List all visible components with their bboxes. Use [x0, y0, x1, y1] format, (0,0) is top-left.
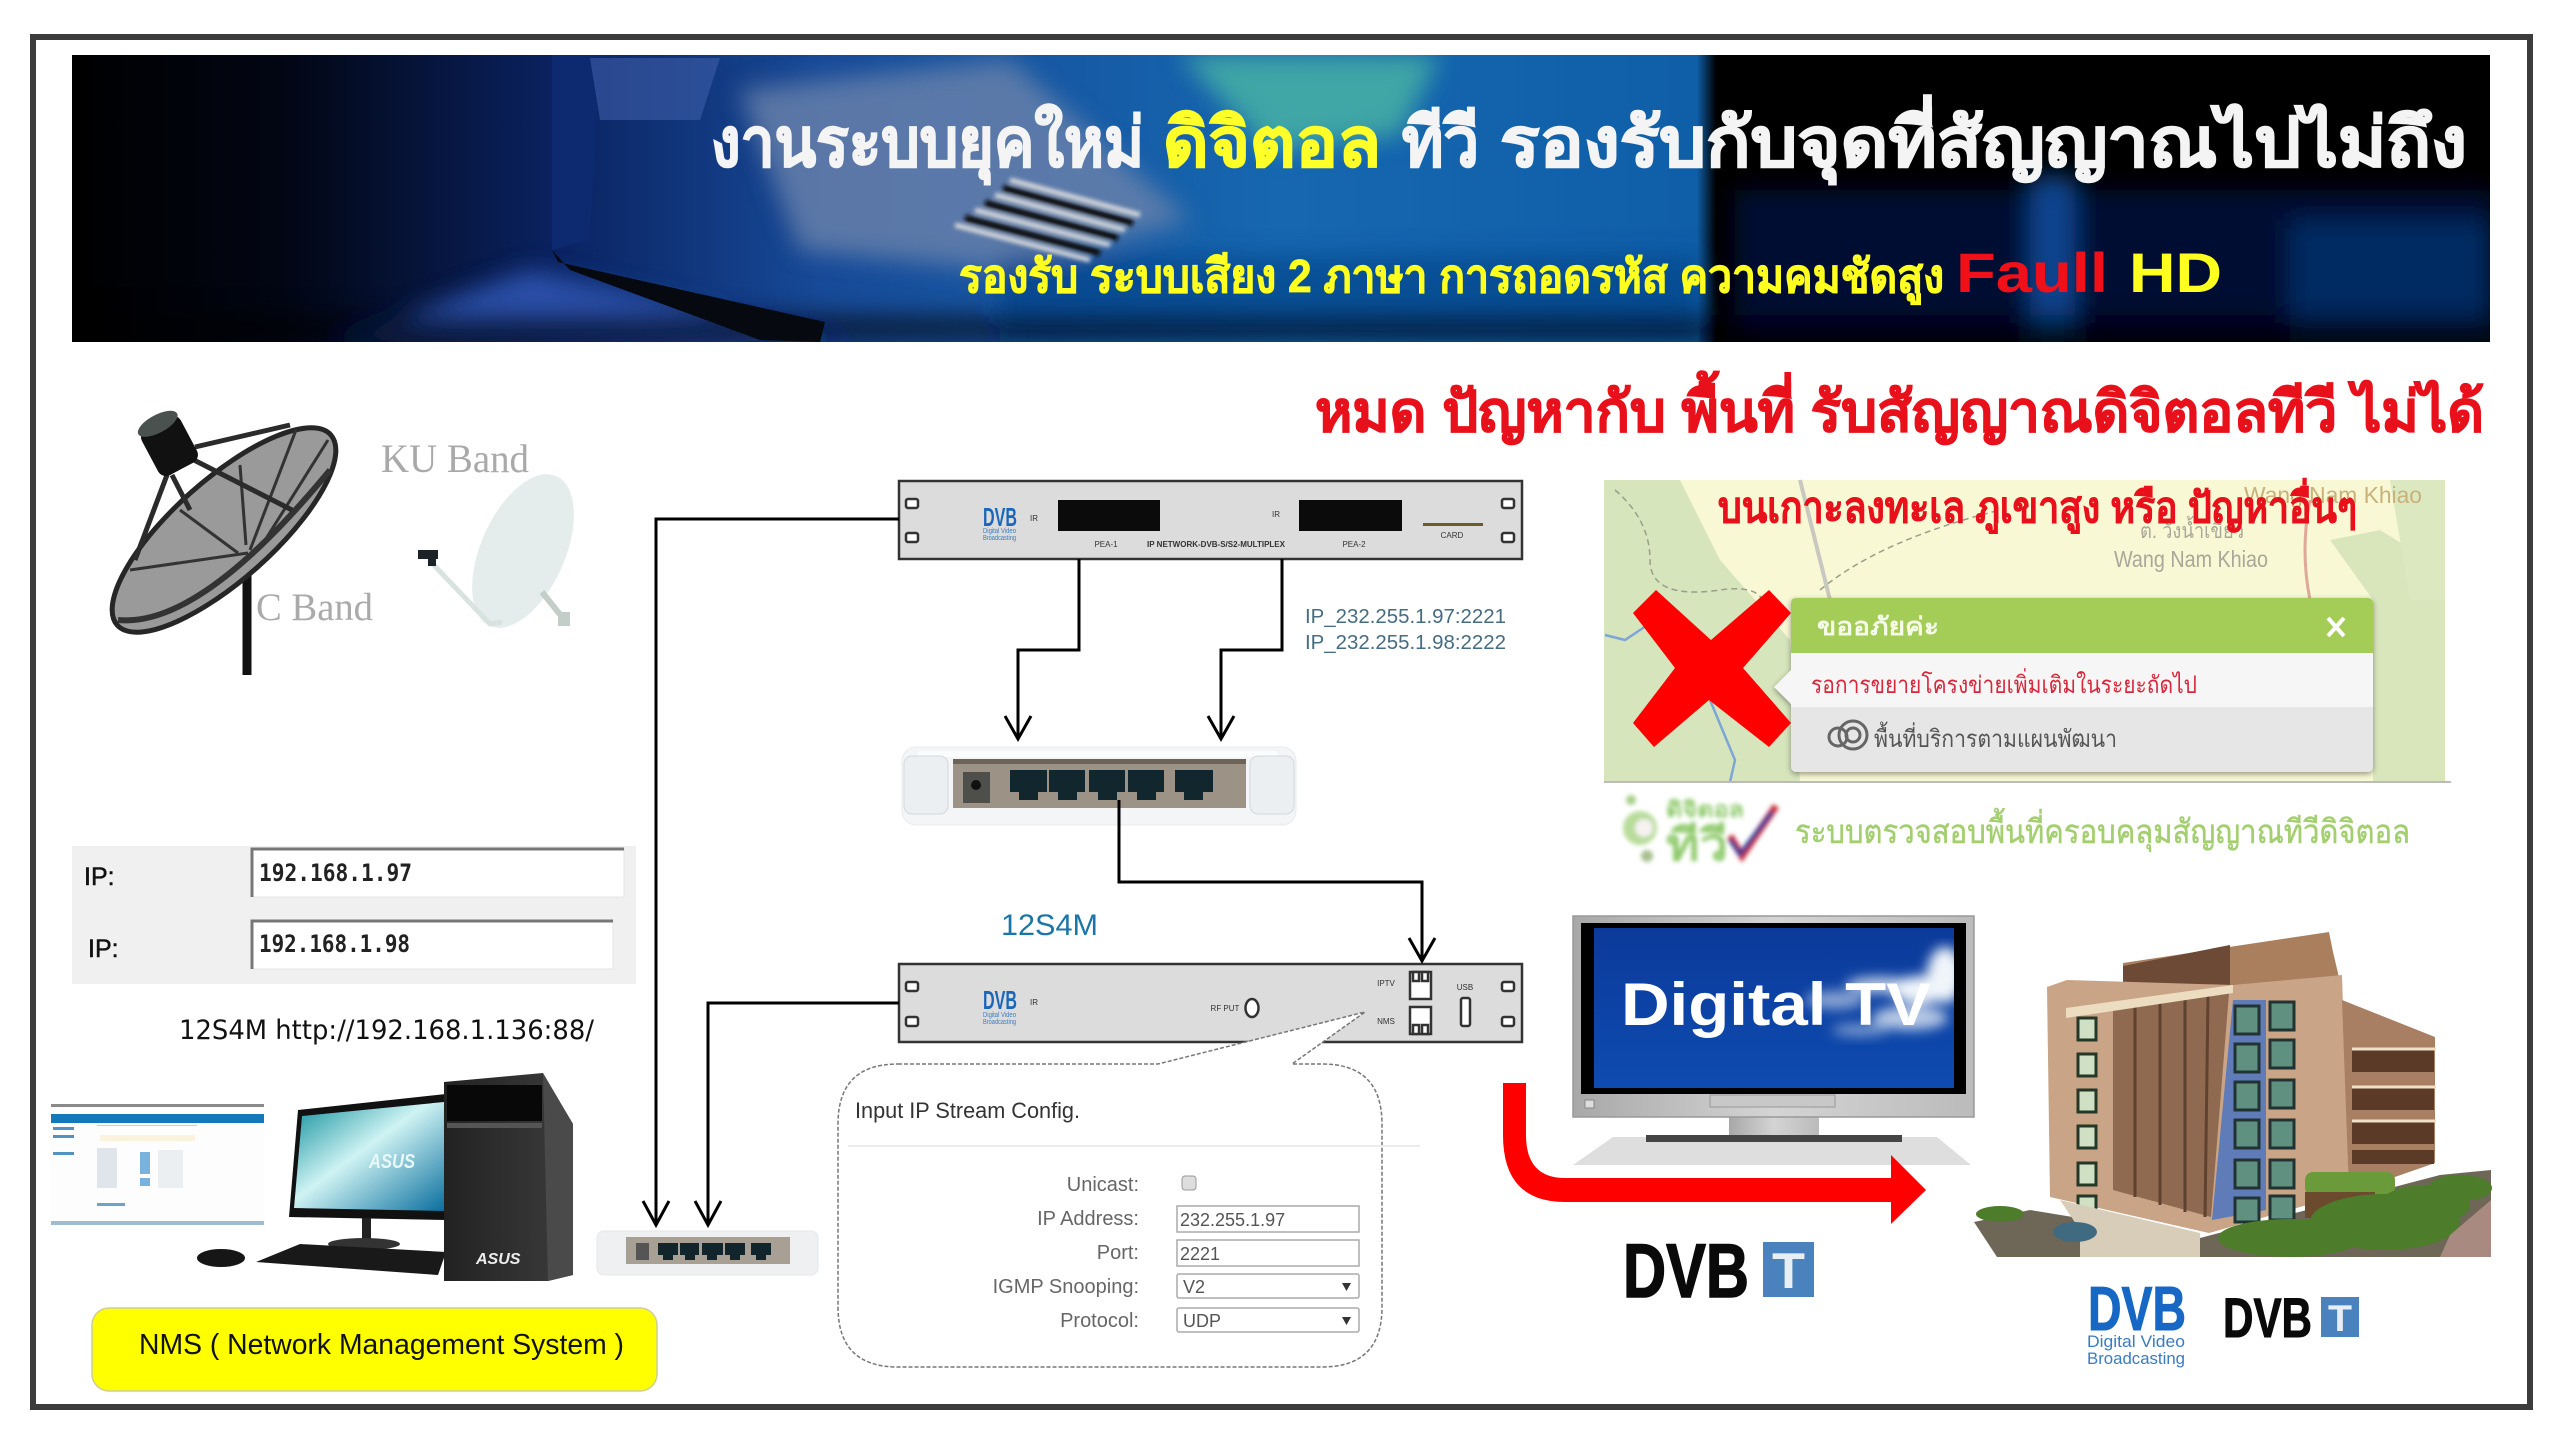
banner title: ทีวี — [1402, 105, 1479, 181]
banner title: ดิจิตอล — [1163, 105, 1381, 181]
arrow: 12S4M to NMS switch — [695, 1003, 899, 1225]
arrow: PEA-1 to switch — [1005, 559, 1079, 739]
logo: DVB-T small: T — [2328, 1298, 2352, 1339]
callout: input IP stream config: Input IP Stream Config. — [855, 1098, 1080, 1123]
banner subtitle: รองรับ ระบบเสียง 2 ภาษา การถอดรหัส ความคมชัดสูง — [959, 250, 1944, 305]
logo: DVB: Digital Video — [983, 528, 1016, 535]
popup: no service: ขออภัยค่ะ — [1817, 613, 1939, 641]
banner subtitle: Faull — [1956, 241, 2108, 304]
red problem heading: หมด ปัญหากับ พื้นที่ รับสัญญาณดิจิตอลทีวี ไม่ได้ — [1315, 371, 2484, 445]
logo: digital TV check: ดิจิตอล — [1666, 797, 1744, 822]
form values: V2 — [1183, 1277, 1205, 1297]
panel: NMS label: NMS ( Network Management System ) — [139, 1329, 624, 1361]
panel labels: PEA-1 — [1094, 540, 1118, 549]
device: DVB-S/S2 multiplex rack — [899, 481, 1522, 559]
multicast IP labels: IP_232.255.1.97:2221 — [1305, 606, 1506, 628]
logo: DVB blue: Broadcasting — [2087, 1349, 2185, 1368]
building windows — [2078, 1018, 2096, 1216]
building gardens — [1976, 1172, 2492, 1257]
form fields — [1177, 1206, 1359, 1332]
logo: DVB: Broadcasting — [983, 535, 1016, 542]
ip labels: IP: — [84, 863, 115, 891]
banner subtitle — [959, 241, 2222, 305]
tower — [444, 1073, 573, 1281]
panel labels: IP NETWORK-DVB-S/S2-MULTIPLEX — [1147, 540, 1286, 549]
form labels — [993, 1174, 1139, 1332]
building ground — [1974, 1170, 2491, 1257]
logo: DVB blue: DVB — [2088, 1275, 2186, 1344]
device: 12S4M rack: NMS — [1377, 1017, 1395, 1026]
form values: 2221 — [1180, 1244, 1220, 1264]
monitor — [289, 1094, 446, 1250]
connection arrows — [643, 519, 1435, 1225]
icon: KU band dish — [418, 459, 595, 643]
screenshot: NMS web page — [51, 1104, 264, 1225]
label: 12S4M: 12S4M — [1001, 909, 1098, 942]
panel: coverage map — [1604, 478, 2451, 782]
banner — [72, 55, 2495, 342]
logo: digital TV check: ทีวี — [1666, 821, 1728, 870]
arrow: PEA-2 to switch — [1208, 559, 1282, 739]
logo: DVB: Digital Video — [983, 1012, 1016, 1019]
banner title — [711, 94, 2467, 185]
dropdown markers — [1342, 1283, 1351, 1325]
form labels: Protocol: — [1060, 1310, 1139, 1332]
multicast IP labels — [1305, 606, 1506, 654]
popup: no service: รอการขยายโครงข่ายเพิ่มเติมในระยะถัดไป — [1811, 668, 2197, 699]
logo: DVB: DVB — [983, 985, 1017, 1015]
icon: apartment building — [1974, 932, 2492, 1257]
label: C Band: C Band — [256, 586, 373, 629]
banner title: รองรับกับจุดที่สัญญาณไปไม่ถึง — [1500, 94, 2467, 185]
device: 12S4M rack: USB — [1457, 983, 1473, 992]
popup: no service: พื้นที่บริการตามแผนพัฒนา — [1874, 721, 2117, 753]
form labels: IGMP Snooping: — [993, 1276, 1139, 1298]
ip input 1 — [252, 849, 624, 897]
multicast IP labels: IP_232.255.1.98:2222 — [1305, 632, 1506, 654]
panel labels: IR — [1272, 510, 1280, 519]
form labels: Port: — [1097, 1242, 1139, 1264]
switch: main — [902, 747, 1296, 825]
banner title: งานระบบยุคใหม่ — [711, 103, 1144, 185]
ip input 1: 192.168.1.97 — [259, 859, 412, 887]
ip input 2: 192.168.1.98 — [259, 930, 410, 958]
ip labels: IP: — [88, 935, 119, 963]
arrow: red broadcast — [1503, 1083, 1926, 1224]
banner subtitle: HD — [2129, 241, 2222, 304]
panel: IP settings — [72, 846, 636, 984]
logo: DVB — [983, 502, 1017, 542]
ip input 2 — [252, 921, 613, 969]
arrow: multiplex to NMS switch — [643, 519, 899, 1225]
device: 12S4M rack: RF PUT — [1211, 1004, 1240, 1013]
icon: digital TV — [1573, 916, 1974, 1165]
tower: ASUS — [475, 1251, 521, 1268]
panel: NMS label — [92, 1308, 657, 1391]
icon: coverage signal — [1829, 721, 1867, 749]
icon: C band satellite dish — [84, 398, 364, 675]
label: KU Band: KU Band — [381, 436, 529, 481]
form values: UDP — [1183, 1311, 1221, 1331]
monitor: ASUS — [368, 1151, 416, 1173]
ip labels — [84, 863, 119, 963]
popup: no service — [1774, 598, 2373, 772]
form checkbox — [1182, 1176, 1196, 1190]
logo: DVB: Broadcasting — [983, 1019, 1016, 1026]
icon: desktop computer — [197, 1073, 573, 1281]
device: 12S4M rack: IR — [1030, 998, 1038, 1007]
panel labels: CARD — [1441, 531, 1464, 540]
logo: digital TV check — [1623, 795, 1776, 870]
url label: 12S4M http://192.168.1.136:88/ — [179, 1015, 595, 1046]
logo: DVB-T large: T — [1772, 1243, 1805, 1299]
logo: DVB blue — [2087, 1275, 2186, 1368]
logo: DVB: DVB — [983, 502, 1017, 532]
keyboard — [256, 1244, 446, 1275]
logo: DVB-T small: DVB — [2223, 1286, 2312, 1349]
map place names: ต. วังน้ำเขียว — [2140, 516, 2244, 543]
form labels: IP Address: — [1037, 1208, 1139, 1230]
logo: DVB blue: Digital Video — [2087, 1332, 2185, 1351]
logo: DVB-T large: DVB — [1623, 1229, 1749, 1314]
map place names: Wang Nam Khiao — [2114, 546, 2268, 572]
map place names: Wang Nam Khiao — [2244, 482, 2422, 508]
form values — [1180, 1210, 1285, 1331]
panel labels: IR — [1030, 514, 1038, 523]
panel labels: PEA-2 — [1342, 540, 1366, 549]
callout: input IP stream config — [838, 1012, 1420, 1367]
coverage system caption: ระบบตรวจสอบพื้นที่ครอบคลุมสัญญาณทีวีดิจิตอล — [1795, 808, 2410, 852]
form labels: Unicast: — [1067, 1174, 1139, 1196]
logo: DVB — [983, 985, 1017, 1026]
form values: 232.255.1.97 — [1180, 1210, 1285, 1230]
panel labels — [1030, 510, 1464, 549]
device: 12S4M rack: IPTV — [1377, 979, 1396, 988]
map place names — [2114, 482, 2422, 572]
tv text: Digital TV — [1621, 971, 1931, 1038]
arrow: switch to 12S4M IPTV — [1119, 800, 1435, 961]
mouse — [197, 1249, 245, 1267]
icon: red X — [1633, 590, 1791, 747]
device: 12S4M rack — [899, 964, 1522, 1042]
tv cloud — [1805, 947, 1963, 1036]
switch: NMS side — [597, 1231, 818, 1275]
map heading: บนเกาะลงทะเล ภูเขาสูง หรือ ปัญหาอื่นๆ — [1718, 478, 2357, 534]
